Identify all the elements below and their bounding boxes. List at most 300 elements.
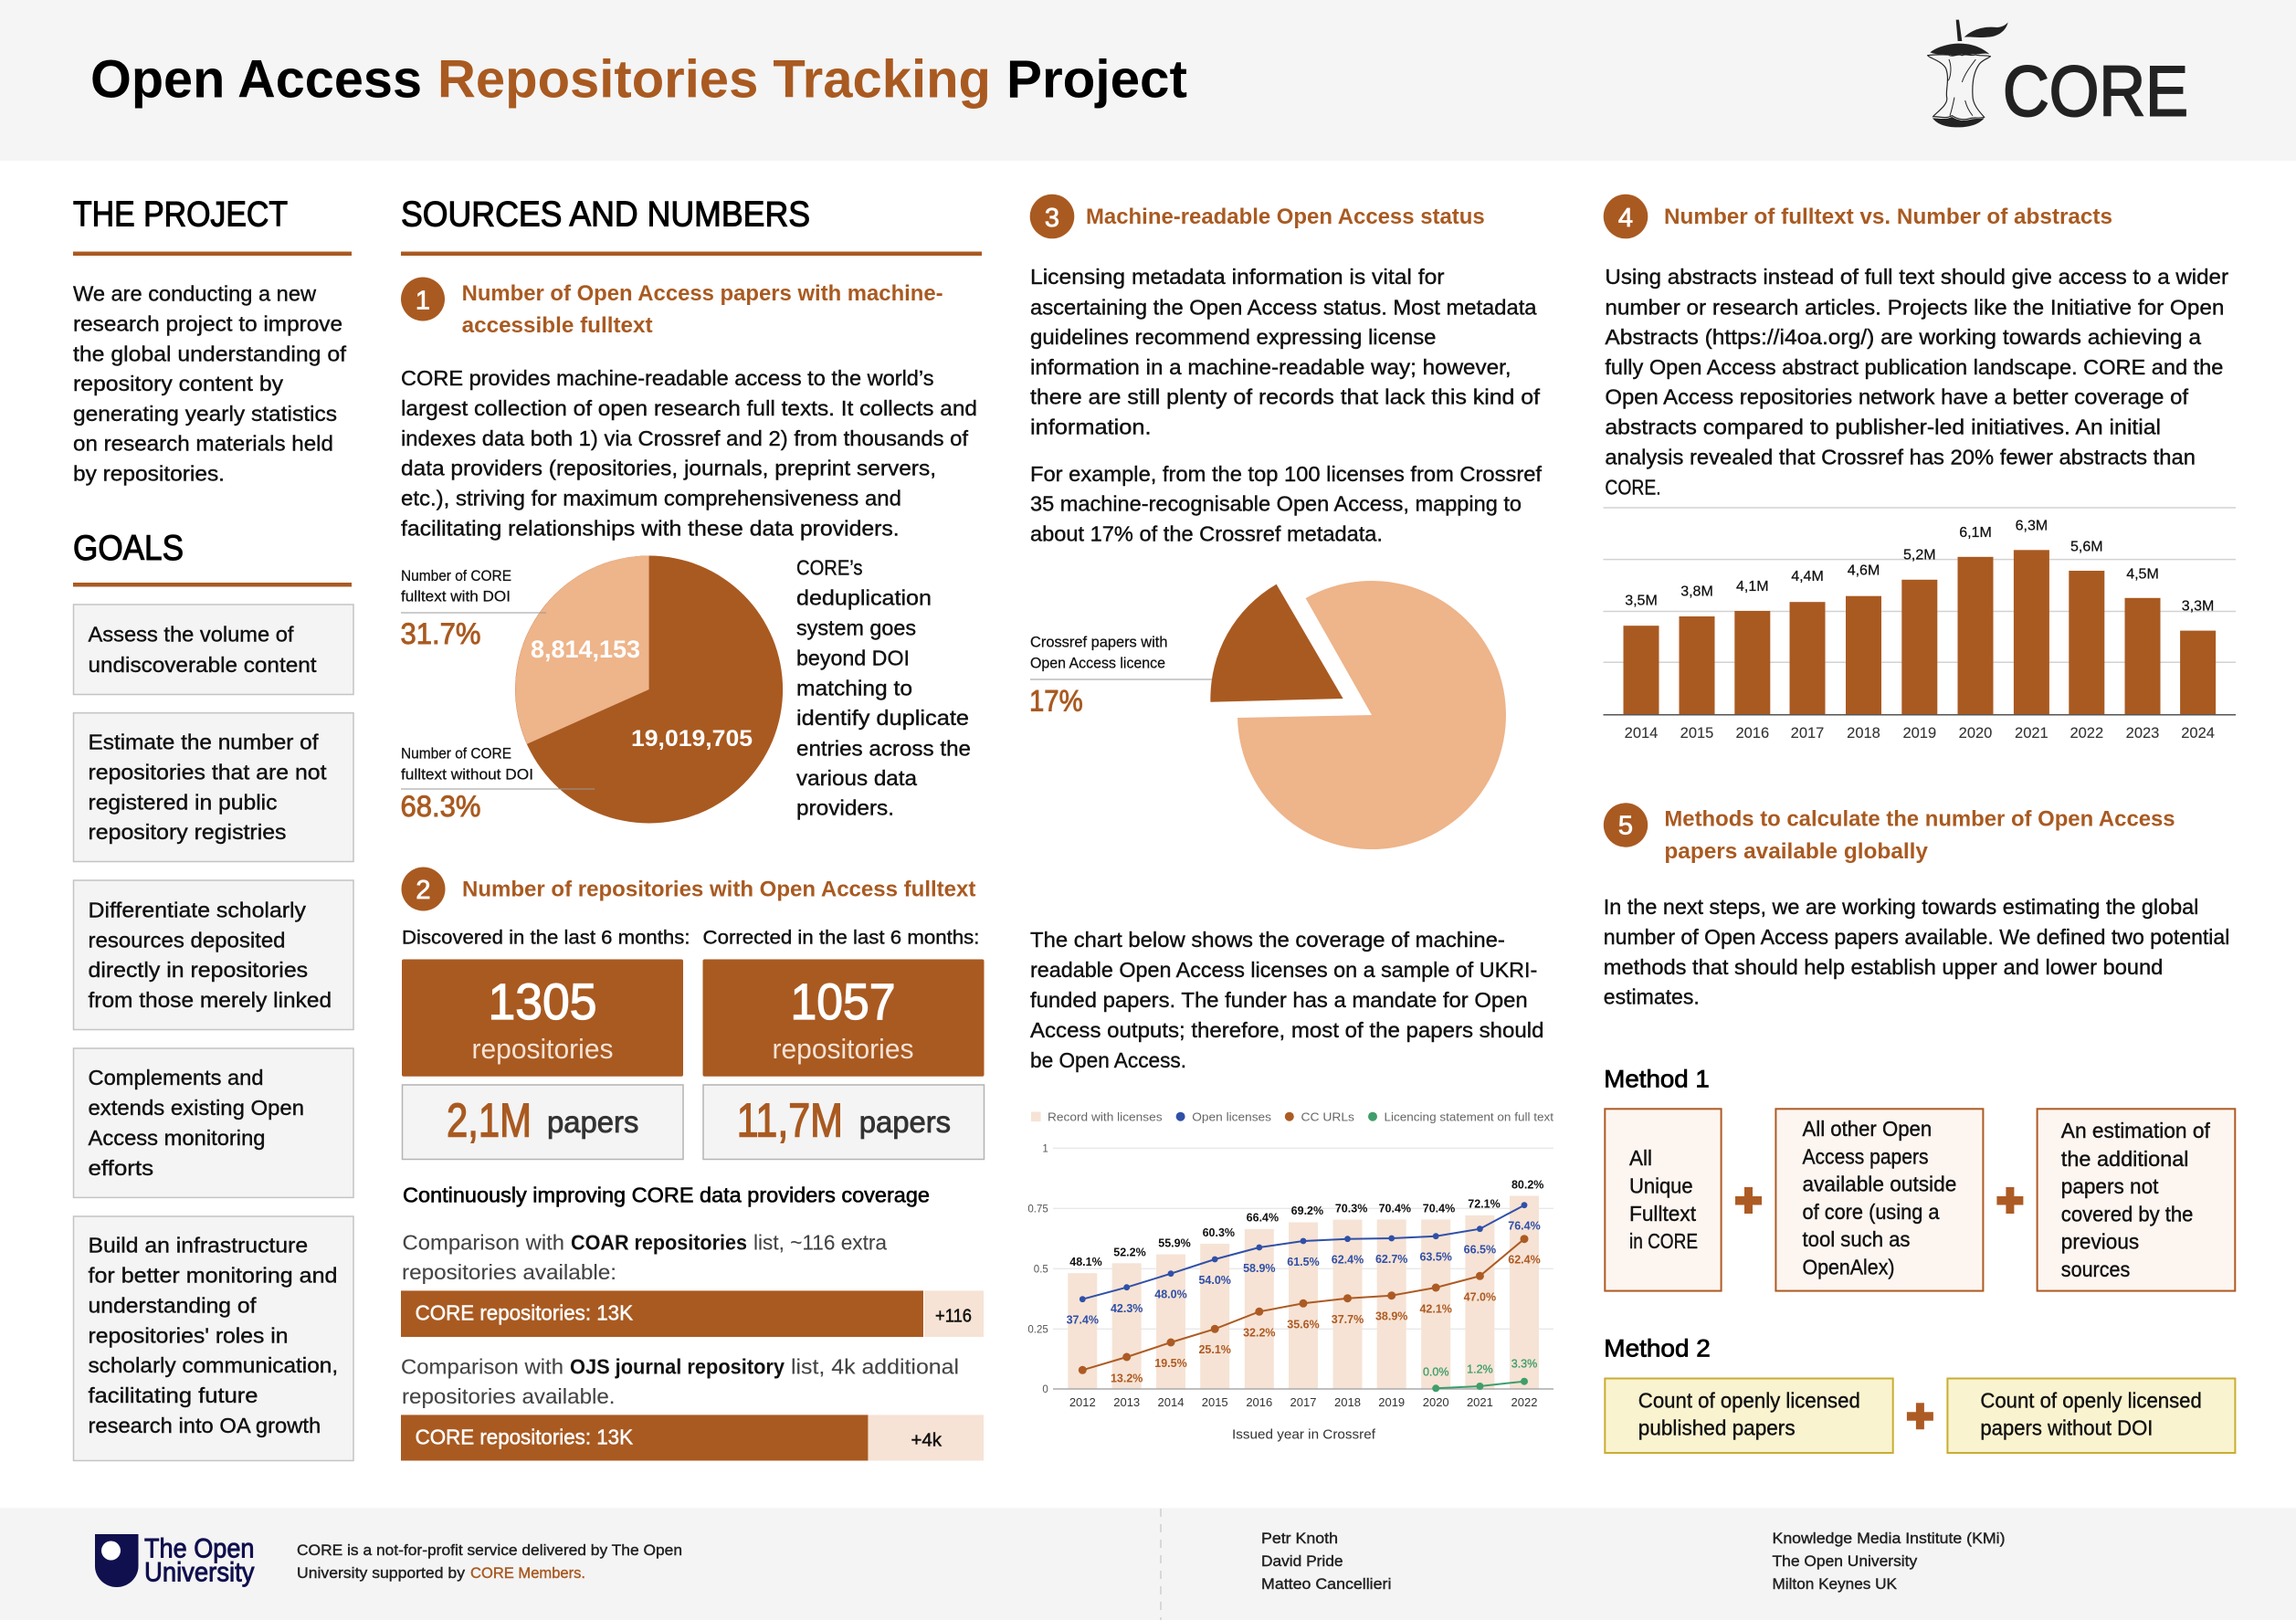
- icon: plus: [1735, 1187, 1762, 1214]
- text: section 5 body: [1604, 895, 2229, 1008]
- bar year labels: 2018: [1847, 725, 1880, 742]
- bar value labels: 3,8M: [1680, 584, 1713, 600]
- logo wordmark: CORE: [2003, 51, 2188, 131]
- stat: discovered repositories: repositories: [471, 1033, 614, 1065]
- method 1 box: unique fulltext: in CORE: [1629, 1229, 1698, 1253]
- bar value labels: 4,1M: [1736, 579, 1769, 594]
- section 1 heading: accessible fulltext: [462, 313, 653, 338]
- title: Project: [1006, 49, 1187, 110]
- heading: sources and numbers: [401, 195, 982, 256]
- pie chart: DOI split: [515, 555, 783, 824]
- method 1 box: unique fulltext: [1605, 1109, 1722, 1291]
- text: section 4 body: number or research articles. Projects like the Initiative for Open: [1605, 295, 2224, 319]
- bar year labels: 2016: [1735, 725, 1769, 742]
- footer affiliation: Knowledge Media Institute (KMi): [1772, 1530, 2006, 1547]
- section 3 heading: Machine-readable Open Access status: [1086, 205, 1485, 229]
- comparison: COAR: Comparison with: [402, 1231, 564, 1255]
- header band: [0, 0, 2296, 161]
- method 2 box: licensed published: Count of openly licensed: [1638, 1388, 1860, 1412]
- data labels: CC URLs: 37.7%: [1332, 1313, 1364, 1326]
- chart y axis labels: 1: [1042, 1143, 1048, 1154]
- text: deduplication note: various data: [796, 766, 917, 790]
- bar value labels: 5,6M: [2070, 539, 2103, 554]
- chart x axis labels: 2019: [1378, 1395, 1405, 1409]
- data labels: open licenses: 58.9%: [1243, 1262, 1276, 1275]
- chart y axis labels: 0.75: [1027, 1204, 1048, 1215]
- stat: discovered papers: [402, 1085, 683, 1160]
- data labels: open licenses: 76.4%: [1508, 1220, 1541, 1233]
- section 4 heading: Number of fulltext vs. Number of abstracts: [1664, 205, 2112, 229]
- text: section 5 body: methods that should help establish upper and lower bound: [1604, 955, 2163, 979]
- text: section 1 body: CORE provides machine-readable access to the world’s: [401, 366, 933, 390]
- bar year labels: [1625, 725, 2215, 742]
- chart axis title: Issued year in Crossref: [1232, 1428, 1376, 1443]
- bar chart: fulltext by year: [1604, 508, 2236, 742]
- text: deduplication note: beyond DOI: [796, 647, 910, 670]
- pie label: without DOI: Number of CORE: [401, 745, 511, 763]
- method 1 box: estimation: sources: [2061, 1257, 2130, 1281]
- footer affiliation: [1772, 1530, 2006, 1593]
- text: section 5 body: estimates.: [1604, 984, 1700, 1008]
- bar: COAR coverage: CORE repositories: 13K: [416, 1300, 634, 1324]
- panel: goal 2: repository registries: [88, 820, 287, 844]
- section 2 heading: Number of repositories with Open Access fulltext: [462, 878, 975, 902]
- panel: goal 1: undiscoverable content: [88, 653, 317, 677]
- stat: corrected repositories: 1057: [791, 973, 895, 1030]
- bar year labels: 2023: [2126, 725, 2159, 742]
- data labels: open licenses: 66.5%: [1464, 1244, 1496, 1257]
- panel: goal 4: Access monitoring: [88, 1126, 265, 1150]
- pie label: licence: [1029, 634, 1212, 718]
- text: project description: the global understanding of: [73, 342, 347, 365]
- chart x axis labels: 2020: [1423, 1395, 1449, 1409]
- stat: discovered papers: papers: [547, 1105, 638, 1139]
- text: section 1 body: data providers (repositories, journals, preprint servers,: [401, 457, 936, 480]
- chart bars: records with licenses: [1068, 1196, 1539, 1389]
- CORE logo: [1928, 20, 2188, 131]
- method 1 box: unique fulltext: All: [1629, 1146, 1652, 1170]
- pie chart: DOI split: 19,019,705: [631, 726, 753, 752]
- method 2 box: licensed without DOI: Count of openly licensed: [1980, 1388, 2202, 1412]
- method 1 heading: Method 1: [1604, 1065, 1710, 1092]
- line series: CC URLs: [1079, 1235, 1529, 1374]
- chart x axis labels: 2017: [1290, 1395, 1316, 1409]
- bar: OJS coverage: CORE repositories: 13K: [416, 1425, 634, 1448]
- text: section 3 chart intro: funded papers. The funder has a mandate for Open: [1030, 988, 1528, 1012]
- method 2 heading: Method 2: [1604, 1334, 1711, 1362]
- data labels: record totals: 69.2%: [1291, 1204, 1323, 1217]
- pie chart: DOI split: 8,814,153: [531, 636, 640, 663]
- chart y axis labels: [1027, 1143, 1048, 1395]
- Open University logo: [95, 1534, 254, 1588]
- text: project description: We are conducting a new: [73, 281, 316, 305]
- panel: goal 3: from those merely linked: [88, 988, 332, 1012]
- method 1 box: estimation: papers not: [2061, 1174, 2159, 1198]
- text: section 1 body: [401, 366, 977, 541]
- stat: corrected papers: [703, 1085, 985, 1160]
- comparison: OJS: repositories available.: [402, 1384, 616, 1408]
- data labels: open licenses: 54.0%: [1198, 1274, 1231, 1287]
- footer authors: Petr Knoth: [1261, 1530, 1338, 1547]
- method 1 box: estimation: [2038, 1109, 2235, 1291]
- bar value labels: 5,2M: [1903, 548, 1936, 563]
- comparison: COAR: repositories available:: [402, 1260, 616, 1284]
- text: section 3 chart intro: [1030, 928, 1543, 1072]
- chart x axis labels: 2022: [1511, 1395, 1537, 1409]
- icon: plus: [1996, 1187, 2023, 1214]
- chart y axis labels: 0.5: [1034, 1264, 1048, 1275]
- bar: COAR coverage: +116: [935, 1306, 972, 1326]
- data labels: CC URLs: 62.4%: [1508, 1254, 1541, 1267]
- footer band: [0, 1508, 2296, 1620]
- bar year labels: 2022: [2070, 725, 2103, 742]
- panel: goal 5: [73, 1216, 353, 1461]
- bar value labels: 6,3M: [2016, 519, 2048, 534]
- stat: discovered repositories: [402, 959, 683, 1077]
- data labels: CC URLs: 47.0%: [1464, 1290, 1496, 1303]
- data labels: CC URLs: 35.6%: [1287, 1318, 1320, 1331]
- method 1 box: estimation: covered by the: [2061, 1202, 2193, 1226]
- text: section 5 body: In the next steps, we are working towards estimating the global: [1604, 895, 2198, 919]
- method 1 box: other open access papers: Access papers: [1803, 1145, 1929, 1169]
- text: section 3 intro: Licensing metadata information is vital for: [1030, 265, 1445, 289]
- bar value labels: 4,4M: [1791, 569, 1824, 584]
- data labels: record totals: 66.4%: [1247, 1212, 1279, 1225]
- comparison: OJS: Comparison with: [401, 1355, 563, 1379]
- pie label: with DOI: [400, 567, 546, 650]
- pie label: with DOI: Number of CORE: [401, 567, 511, 584]
- section 3 heading: [1030, 195, 1485, 238]
- chart x axis labels: 2018: [1334, 1395, 1361, 1409]
- pie label: without DOI: 68.3%: [400, 790, 480, 823]
- data labels: record totals: 70.4%: [1379, 1202, 1411, 1215]
- panel: goal 5: for better monitoring and: [88, 1264, 338, 1288]
- panel: goal 5: facilitating future: [88, 1383, 258, 1407]
- pie chart: licence share: [1210, 581, 1506, 849]
- pie label: with DOI: fulltext with DOI: [401, 588, 511, 605]
- bar value labels: 4,5M: [2126, 567, 2159, 583]
- chart x axis labels: 2016: [1246, 1395, 1272, 1409]
- icon: apple core: [1928, 20, 2008, 127]
- method 1 box: estimation: the additional: [2061, 1147, 2188, 1171]
- data labels: licencing statement: 1.2%: [1467, 1363, 1493, 1376]
- text: section 4 body: CORE.: [1605, 475, 1661, 499]
- bar year labels: 2024: [2181, 725, 2215, 742]
- text: section 1 body: facilitating relationships with these data providers.: [401, 517, 900, 541]
- text: section 4 body: abstracts compared to publisher-led initiatives. An initial: [1605, 415, 2161, 438]
- chart x axis labels: [1069, 1395, 1537, 1409]
- data labels: record totals: [1069, 1178, 1543, 1268]
- footer authors: [1261, 1530, 1391, 1593]
- text: deduplication note: system goes: [796, 615, 916, 639]
- section 5 heading: [1604, 803, 2175, 864]
- text: section 3 chart intro: be Open Access.: [1030, 1048, 1186, 1072]
- data labels: CC URLs: 42.1%: [1419, 1302, 1452, 1315]
- text: deduplication note: CORE’s: [796, 555, 862, 579]
- icon: plus: [1907, 1403, 1933, 1429]
- panel: goal 4: [73, 1048, 353, 1197]
- data labels: licencing statement: [1423, 1358, 1537, 1378]
- data labels: open licenses: [1067, 1220, 1541, 1327]
- bar: OJS coverage: [401, 1415, 984, 1461]
- section 3 heading: 3: [1045, 204, 1059, 233]
- data labels: CC URLs: 25.1%: [1198, 1343, 1231, 1356]
- title: [90, 49, 1187, 110]
- panel: goal 2: repositories that are not: [88, 760, 327, 784]
- data labels: CC URLs: 19.5%: [1154, 1357, 1187, 1370]
- method 1 box: other open access papers: available outside: [1803, 1173, 1956, 1196]
- data labels: CC URLs: 38.9%: [1375, 1310, 1407, 1323]
- comparison: COAR: COAR repositories: [571, 1231, 747, 1255]
- panel: goal 4: extends existing Open: [88, 1096, 304, 1120]
- text: deduplication note: entries across the: [796, 736, 971, 760]
- data labels: record totals: 80.2%: [1511, 1178, 1543, 1191]
- panel: goal 1: [73, 605, 353, 694]
- text: project description: by repositories.: [73, 462, 225, 486]
- text: section 3 intro: ascertaining the Open Access status. Most metadata: [1030, 295, 1537, 319]
- chart x axis labels: 2014: [1158, 1395, 1184, 1409]
- panel: goal 5: scholarly communication,: [88, 1353, 338, 1377]
- chart legend: Record with licenses: [1048, 1110, 1163, 1124]
- text: section 3 example: For example, from the top 100 licenses from Crossref: [1030, 462, 1543, 486]
- stat: corrected repositories: [703, 959, 985, 1077]
- data labels: open licenses: 62.4%: [1332, 1253, 1364, 1266]
- data labels: open licenses: 63.5%: [1419, 1251, 1452, 1264]
- panel: goal 3: directly in repositories: [88, 958, 308, 982]
- panel: goal 3: Differentiate scholarly: [88, 899, 307, 922]
- heading: goals: [73, 529, 352, 586]
- text: section 3 example: about 17% of the Crossref metadata.: [1030, 522, 1383, 546]
- comparison: COAR: [401, 1231, 984, 1337]
- text: section 3 intro: information.: [1030, 415, 1151, 438]
- data labels: CC URLs: [1111, 1254, 1541, 1385]
- chart x axis labels: 2015: [1202, 1395, 1228, 1409]
- method 1 box: other open access papers: tool such as: [1803, 1227, 1911, 1251]
- chart y axis labels: 0: [1042, 1384, 1048, 1395]
- text: section 1 body: etc.), striving for maximum comprehensiveness and: [401, 486, 901, 510]
- text: deduplication note: deduplication: [796, 586, 932, 610]
- bar year labels: 2021: [2015, 725, 2048, 742]
- data labels: record totals: 55.9%: [1158, 1237, 1191, 1250]
- bar: COAR coverage: [401, 1290, 984, 1337]
- bar year labels: 2015: [1680, 725, 1713, 742]
- title: Open Access: [90, 49, 422, 110]
- text: section 3 intro: guidelines recommend expressing license: [1030, 325, 1436, 349]
- text: section 1 body: largest collection of open research full texts. It collects and: [401, 396, 977, 420]
- chart x axis labels: 2021: [1467, 1395, 1493, 1409]
- footer note: CORE is a not-for-profit service delivered by The Open: [297, 1541, 682, 1559]
- text: section 4 body: Abstracts (https://i4oa.org/) are working towards achieving a: [1605, 325, 2201, 349]
- chart legend: CC URLs: [1301, 1110, 1355, 1124]
- panel: goal 2: [73, 713, 353, 862]
- comparison: OJS: [401, 1355, 984, 1461]
- sub-labels: six month periods: Discovered in the last 6 months:: [402, 928, 690, 948]
- text: deduplication note: providers.: [796, 796, 894, 820]
- text: project description: generating yearly statistics: [73, 402, 337, 426]
- data labels: record totals: 52.2%: [1113, 1246, 1146, 1258]
- method 2 box: licensed published: published papers: [1638, 1415, 1796, 1439]
- heading: goals: GOALS: [73, 529, 184, 568]
- bar value labels: 6,1M: [1959, 525, 1992, 541]
- section 4 heading: 4: [1618, 204, 1633, 233]
- text: section 3 example: 35 machine-recognisable Open Access, mapping to: [1030, 491, 1522, 515]
- stat: corrected papers: 11,7M: [737, 1094, 843, 1147]
- bar value labels: 3,5M: [1625, 594, 1658, 608]
- comparison: COAR: list, ~116 extra: [753, 1231, 887, 1255]
- text: project description: [73, 281, 347, 486]
- data labels: licencing statement: 3.3%: [1511, 1358, 1537, 1371]
- data labels: open licenses: 48.0%: [1154, 1289, 1187, 1301]
- data labels: CC URLs: 13.2%: [1111, 1373, 1143, 1385]
- bar year labels: 2014: [1625, 725, 1658, 742]
- subheading: coverage: Continuously improving CORE data providers coverage: [403, 1183, 930, 1207]
- footer affiliation: The Open University: [1772, 1552, 1918, 1570]
- chart: licence coverage by year: [1027, 1110, 1553, 1443]
- sub-labels: six month periods: Corrected in the last 6 months:: [703, 928, 979, 948]
- data labels: open licenses: 37.4%: [1067, 1314, 1099, 1327]
- text: section 4 body: Using abstracts instead of full text should give access to a wider: [1605, 265, 2228, 289]
- panel: goal 5: understanding of: [88, 1293, 257, 1317]
- heading: sources and numbers: SOURCES AND NUMBERS: [401, 195, 810, 234]
- stat: corrected repositories: repositories: [773, 1033, 913, 1065]
- panel: goal 5: Build an infrastructure: [88, 1233, 308, 1257]
- heading: the project: [73, 195, 352, 256]
- panel: goal 2: Estimate the number of: [88, 731, 319, 754]
- text: deduplication note: matching to: [796, 676, 912, 700]
- text: section 3 example: [1030, 462, 1543, 546]
- data labels: record totals: 60.3%: [1203, 1226, 1235, 1239]
- bar value labels: 3,3M: [2182, 598, 2214, 614]
- text: project description: repository content by: [73, 372, 284, 395]
- text: section 3 intro: [1030, 265, 1541, 438]
- method 1 box: unique fulltext: Unique: [1629, 1174, 1693, 1198]
- text: deduplication note: [796, 555, 971, 820]
- text: section 3 intro: there are still plenty of records that lack this kind of: [1030, 385, 1541, 409]
- text: section 4 body: fully Open Access abstract publication landscape. CORE and the: [1605, 355, 2223, 379]
- bar year labels: 2020: [1959, 725, 1992, 742]
- chart legend: Licencing statement on full text: [1385, 1110, 1553, 1124]
- text: deduplication note: identify duplicate: [796, 706, 969, 730]
- stat: discovered papers: 2,1M: [447, 1094, 532, 1147]
- text: section 4 body: Open Access repositories network have a better coverage of: [1605, 385, 2189, 409]
- section 5 heading: papers available globally: [1664, 839, 1929, 864]
- panel: goal 2: registered in public: [88, 791, 278, 815]
- panel: goal 3: [73, 880, 353, 1030]
- data labels: record totals: 70.3%: [1335, 1202, 1367, 1215]
- footer authors: David Pride: [1261, 1552, 1343, 1570]
- chart x axis labels: 2012: [1069, 1395, 1096, 1409]
- pie label: licence: 17%: [1029, 685, 1083, 718]
- data labels: licencing statement: 0.0%: [1423, 1365, 1448, 1378]
- pie label: with DOI: 31.7%: [400, 617, 480, 650]
- bars: [1624, 550, 2216, 715]
- footer authors: Matteo Cancellieri: [1261, 1575, 1391, 1593]
- method 1 box: unique fulltext: Fulltext: [1629, 1202, 1697, 1226]
- comparison: OJS: OJS journal repository: [570, 1355, 785, 1379]
- data labels: record totals: 72.1%: [1468, 1197, 1501, 1210]
- footer note: CORE Members.: [470, 1564, 585, 1582]
- stat: corrected papers: papers: [859, 1105, 951, 1139]
- panel: goal 4: Complements and: [88, 1066, 263, 1089]
- data labels: open licenses: 61.5%: [1287, 1256, 1320, 1268]
- method 2 box: licensed without DOI: [1947, 1379, 2235, 1453]
- method 1 box: other open access papers: [1775, 1109, 1983, 1291]
- section 1 heading: Number of Open Access papers with machine-: [462, 281, 943, 306]
- text: section 4 body: [1605, 265, 2228, 499]
- pie label: licence: Open Access licence: [1030, 654, 1165, 671]
- panel: goal 4: efforts: [88, 1156, 153, 1180]
- footer note: University supported by: [297, 1564, 466, 1582]
- heading: the project: THE PROJECT: [73, 195, 288, 234]
- bar value labels: 4,6M: [1848, 563, 1880, 578]
- Open University logo: The Open: [144, 1534, 254, 1563]
- text: section 1 body: indexes data both 1) via Crossref and 2) from thousands of: [401, 426, 969, 450]
- bar year labels: 2019: [1902, 725, 1936, 742]
- bar: OJS coverage: +4k: [911, 1430, 943, 1450]
- method 1 box: other open access papers: All other Open: [1803, 1117, 1932, 1141]
- title: Repositories Tracking: [437, 49, 991, 110]
- bar year labels: 2017: [1791, 725, 1824, 742]
- stat: discovered repositories: 1305: [488, 973, 597, 1030]
- section 5 heading: Methods to calculate the number of Open Access: [1664, 806, 2175, 831]
- section 4 heading: [1604, 195, 2112, 238]
- footer affiliation: Milton Keynes UK: [1772, 1575, 1898, 1593]
- data labels: open licenses: 42.3%: [1111, 1302, 1143, 1315]
- chart y axis labels: 0.25: [1027, 1324, 1048, 1335]
- panel: goal 1: Assess the volume of: [88, 623, 294, 647]
- pie label: without DOI: [400, 745, 595, 823]
- method 1 box: other open access papers: of core (using a: [1803, 1200, 1940, 1224]
- chart legend: Open licenses: [1192, 1110, 1272, 1124]
- panel: goal 3: resources deposited: [88, 928, 285, 952]
- line series: licencing statement: [1432, 1378, 1528, 1392]
- pie label: licence: Crossref papers with: [1030, 634, 1167, 650]
- method 2 box: licensed without DOI: papers without DOI: [1980, 1415, 2153, 1439]
- Open University logo: University: [144, 1558, 254, 1588]
- text: section 3 chart intro: Access outputs; therefore, most of the papers should: [1030, 1018, 1543, 1042]
- text: section 3 intro: information in a machine-readable way; however,: [1030, 355, 1511, 379]
- panel: goal 5: repositories' roles in: [88, 1324, 289, 1348]
- method 2 box: licensed published: [1605, 1379, 1893, 1453]
- pie label: without DOI: fulltext without DOI: [401, 766, 533, 784]
- line series: open licenses: [1080, 1202, 1527, 1302]
- comparison: OJS: list, 4k additional: [791, 1355, 959, 1379]
- section 1 heading: 1: [416, 287, 430, 316]
- data labels: CC URLs: 32.2%: [1243, 1327, 1276, 1340]
- section 2 heading: 2: [416, 876, 431, 905]
- sub-labels: six month periods: [402, 928, 979, 948]
- text: section 4 body: analysis revealed that Crossref has 20% fewer abstracts than: [1605, 446, 2196, 469]
- bar value labels: [1625, 519, 2214, 614]
- data labels: record totals: 48.1%: [1069, 1256, 1102, 1268]
- data labels: open licenses: 62.7%: [1375, 1253, 1407, 1266]
- method 1 box: other open access papers: OpenAlex): [1803, 1255, 1894, 1278]
- text: project description: research project to improve: [73, 312, 342, 336]
- section 5 heading: 5: [1618, 811, 1633, 840]
- method 1 box: estimation: An estimation of: [2061, 1119, 2210, 1142]
- chart x axis labels: 2013: [1113, 1395, 1140, 1409]
- section 1 heading: [401, 278, 943, 338]
- section 2 heading: [402, 868, 975, 911]
- method 1 box: estimation: previous: [2061, 1229, 2139, 1253]
- panel: goal 5: research into OA growth: [88, 1414, 321, 1437]
- chart legend: [1031, 1110, 1553, 1124]
- text: section 3 chart intro: readable Open Access licenses on a sample of UKRI-: [1030, 958, 1537, 982]
- data labels: record totals: 70.4%: [1423, 1202, 1455, 1215]
- text: section 5 body: number of Open Access papers available. We defined two potential: [1604, 925, 2229, 949]
- footer note: [297, 1541, 682, 1582]
- text: section 3 chart intro: The chart below shows the coverage of machine-: [1030, 928, 1505, 952]
